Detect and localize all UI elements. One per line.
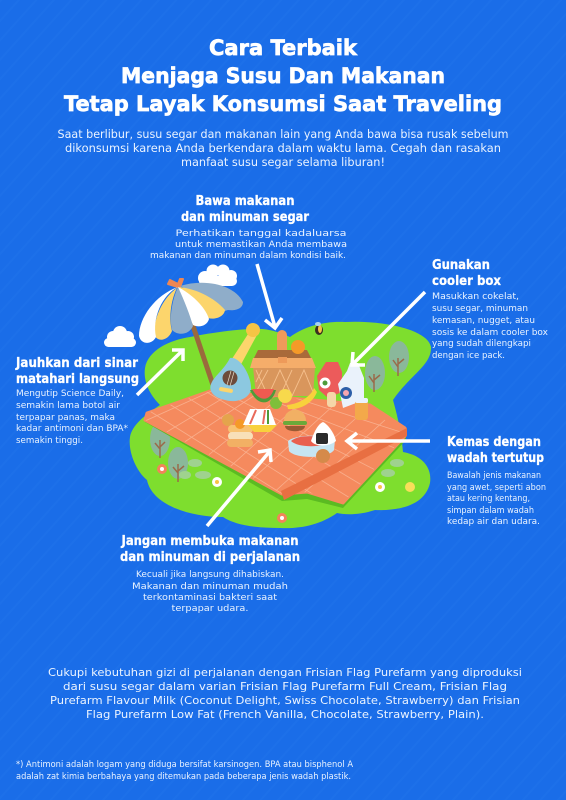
callout: wadah tertutup: atau kering kentang, [447, 494, 530, 504]
callout: sinar matahari: matahari langsung [16, 372, 139, 387]
closing paragraph: dari susu segar dalam varian Frisian Flag Purefarm Full Cream, Frisian Flag [63, 680, 507, 693]
callout: cooler box: kemasan, nugget, atau [432, 316, 535, 326]
callout: cooler box: Gunakan [432, 258, 490, 273]
icon: flowers [157, 464, 415, 523]
callout: wadah tertutup: simpan dalam wadah [447, 506, 534, 516]
callout: wadah tertutup: kedap air dan udara. [447, 517, 540, 527]
callout: bawa makanan: makanan dan minuman dalam kondisi baik. [150, 251, 346, 261]
footnote [16, 760, 353, 782]
callout: wadah tertutup [447, 435, 546, 527]
icon: bee [315, 322, 323, 335]
arrow: to container [347, 433, 430, 449]
closing paragraph: Purefarm Flavour Milk (Coconut Delight, Swiss Chocolate, Strawberry) dan Frisian [50, 694, 520, 707]
arrow: to food [207, 450, 271, 526]
closing paragraph [48, 666, 522, 721]
callout: bawa makanan: Perhatikan tanggal kadaluarsa [176, 229, 346, 239]
illustration: picnic scene [104, 264, 431, 528]
callout: jangan membuka: Makanan dan minuman mudah [132, 582, 288, 592]
callout: sinar matahari: terpapar panas, maka [16, 413, 115, 423]
callout: sinar matahari: kadar antimoni dan BPA* [16, 424, 128, 434]
stones [179, 448, 404, 479]
title: Tetap Layak Konsumsi Saat Traveling [64, 92, 502, 116]
callout: bawa makanan: untuk memastikan Anda membawa [175, 240, 347, 250]
callout: jangan membuka [120, 534, 300, 614]
picnic blanket [144, 390, 407, 508]
icon: picnic basket [250, 330, 316, 396]
callout: cooler box: Masukkan cokelat, [432, 292, 519, 302]
callout: sinar matahari: Jauhkan dari sinar [15, 356, 139, 371]
callout: jangan membuka: Kecuali jika langsung dihabiskan. [136, 570, 284, 580]
icon: clouds [104, 264, 237, 347]
callout: jangan membuka: terkontaminasi bakteri saat [143, 593, 278, 603]
callout: jangan membuka: terpapar udara. [172, 604, 248, 614]
arrow: to cartons [352, 292, 425, 365]
footnote: *) Antimoni adalah logam yang diduga bersifat karsinogen. BPA atau bisphenol A [16, 760, 353, 770]
icon: guitar [210, 323, 260, 401]
callout: cooler box: yang sudah dilengkapi [432, 339, 531, 349]
callout: bawa makanan [150, 194, 347, 261]
intro text: Saat berlibur, susu segar dan makanan lain yang Anda bawa bisa rusak sebelum [58, 127, 508, 141]
callout: cooler box: sosis ke dalam cooler box [432, 328, 549, 338]
title [64, 36, 502, 116]
callout: cooler box: cooler box [432, 274, 502, 289]
intro text: manfaat susu segar selama liburan! [181, 155, 385, 169]
arrow: to basket [257, 264, 282, 328]
callout: jangan membuka: Jangan membuka makanan [121, 534, 298, 549]
callout: bawa makanan: dan minuman segar [181, 210, 310, 225]
callout: cooler box [432, 258, 549, 361]
callout: sinar matahari: semakin tinggi. [16, 436, 83, 446]
closing paragraph: Cukupi kebutuhan gizi di perjalanan dengan Frisian Flag Purefarm yang diproduksi [48, 666, 522, 679]
callout: bawa makanan: Bawa makanan [196, 194, 294, 209]
icon: milk cartons [317, 362, 368, 420]
callout: wadah tertutup: Kemas dengan [447, 435, 541, 450]
callout: sinar matahari: semakin lama botol air [16, 401, 120, 411]
icon: umbrella [139, 279, 243, 385]
closing paragraph: Flag Purefarm Low Fat (French Vanilla, Chocolate, Strawberry, Plain). [86, 708, 484, 721]
callout: sinar matahari [15, 356, 139, 446]
intro text [58, 127, 508, 169]
callout: wadah tertutup: yang awet, seperti abon [447, 483, 546, 493]
callout: cooler box: dengan ice pack. [432, 351, 505, 361]
callout: jangan membuka: dan minuman di perjalanan [120, 550, 300, 565]
arrow: to umbrella [137, 350, 183, 395]
callout: wadah tertutup: wadah tertutup [447, 451, 544, 466]
footnote: adalah zat kimia berbahaya yang ditemukan pada beberapa jenis wadah plastik. [16, 772, 351, 782]
icon: trees [150, 341, 409, 482]
callout: wadah tertutup: Bawalah jenis makanan [447, 471, 541, 481]
icon: food on blanket [222, 409, 336, 463]
title: Menjaga Susu Dan Makanan [121, 64, 445, 88]
callout: cooler box: susu segar, minuman [432, 304, 528, 314]
title: Cara Terbaik [209, 36, 358, 60]
intro text: dikonsumsi karena Anda berkendara dalam waktu lama. Cegah dan rasakan [65, 141, 501, 155]
icon: watermelon and fruit [250, 388, 317, 409]
callout: sinar matahari: Mengutip Science Daily, [16, 389, 124, 399]
green hills [130, 322, 431, 528]
